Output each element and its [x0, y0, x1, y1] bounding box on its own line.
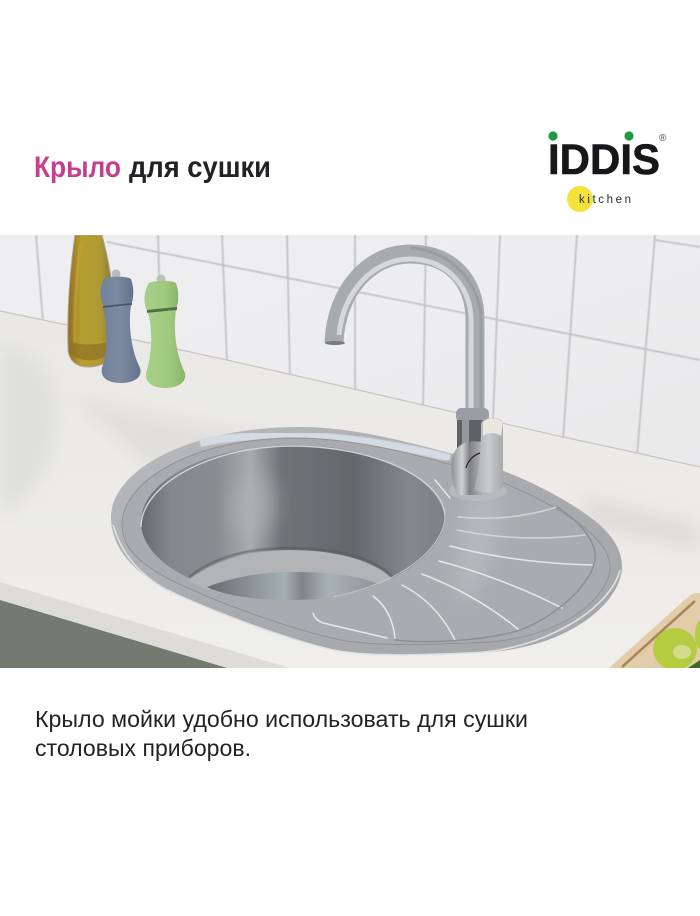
- wall tiles: [0, 235, 700, 475]
- sink: [111, 427, 622, 655]
- logo: iddis kitchen: kitchen: [579, 194, 631, 206]
- pepper mill: green: [145, 274, 185, 388]
- title: [34, 151, 271, 184]
- kitchen photo illustration: [0, 235, 700, 670]
- title: для сушки: [129, 151, 271, 184]
- wing ridges: [313, 480, 595, 642]
- description text: [35, 706, 528, 761]
- pepper mill: blue: [100, 270, 141, 383]
- logo: iddis kitchen: ®: [659, 133, 667, 144]
- wing reflection: [460, 500, 497, 590]
- description text: Крыло мойки удобно использовать для сушки: [35, 706, 528, 732]
- sink rim: [111, 427, 622, 655]
- green pepper: [653, 621, 700, 670]
- cutting board: [609, 593, 700, 668]
- bowl: [141, 445, 444, 578]
- countertop: [0, 311, 700, 668]
- bowl drain step: [189, 550, 392, 596]
- logo: iddis kitchen: [548, 131, 667, 212]
- infographic page: [0, 131, 700, 761]
- oil bottle: [68, 235, 112, 367]
- faucet base: [449, 486, 507, 500]
- drainer wing: [346, 512, 446, 595]
- title: Крыло: [34, 151, 121, 184]
- logo: iddis kitchen: IDDIS: [548, 136, 660, 184]
- description text: столовых приборов.: [35, 735, 251, 761]
- faucet: [325, 248, 507, 501]
- faucet lever: [474, 418, 503, 493]
